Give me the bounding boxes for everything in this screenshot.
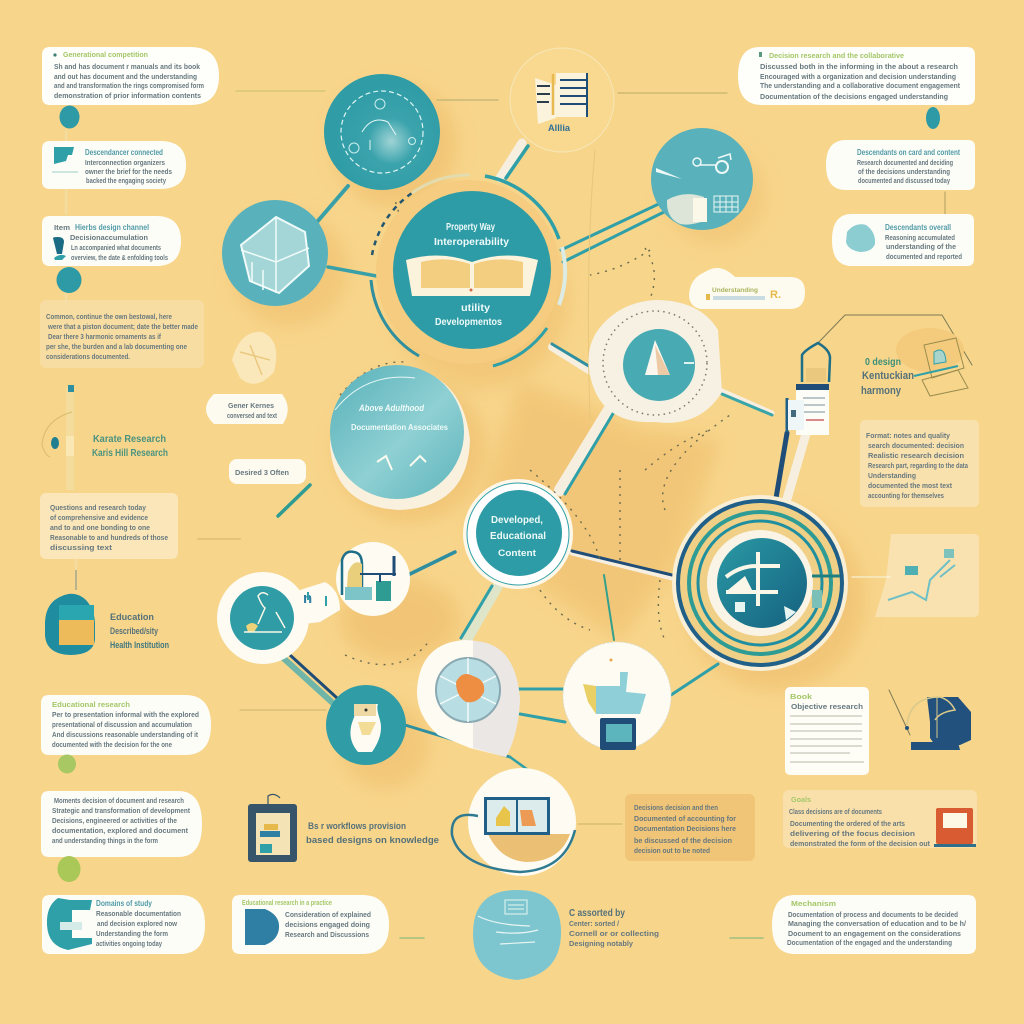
panel: left note 2 — [42, 141, 186, 189]
icon: pale sketch figure — [232, 332, 276, 384]
heading: backpack label: Education — [110, 612, 154, 622]
panel: bottom note 8 — [42, 895, 205, 954]
circle: drawing tools node — [651, 128, 753, 230]
circle: open book ring node: Property Way — [446, 221, 495, 233]
circle: central text node: Content — [498, 548, 536, 558]
icon: tablet device — [248, 794, 297, 862]
circle: open book ring node: Developmentos — [435, 316, 502, 328]
panel: pale note with orange icon: Goals — [791, 795, 811, 804]
panel: orange note — [625, 794, 755, 861]
panel: left note 6: presentational of discussion and accumulation — [52, 720, 192, 729]
panel: bottom right note: Documentation of the engaged and the understanding — [787, 938, 952, 947]
circle: compass dial node — [588, 300, 722, 423]
panel: right note 3: documented and reported — [886, 252, 962, 261]
panel: top left note: demonstration of prior information contents — [54, 91, 201, 100]
panel: ruled white note: Objective research — [791, 702, 863, 711]
panel: top right note: Discussed both in the informing in the about a research — [760, 62, 958, 71]
panel: top right note: Encouraged with a organization and decision understanding — [760, 72, 956, 81]
panel: pale note with orange icon: delivering of the focus decision — [790, 829, 915, 838]
panel: small floating caption — [229, 459, 306, 484]
panel: left note 3: overview, the date & enfolding tools — [71, 253, 168, 262]
circle: ledger book node — [510, 48, 614, 152]
panel: orange note: Decisions decision and then — [634, 803, 718, 812]
panel: left pale note 4: considerations documented. — [46, 352, 130, 361]
heading: right label — [861, 357, 914, 397]
panel: left note 3: Hierbs design channel — [75, 223, 149, 232]
panel: right pale text note: Realistic research decision — [868, 451, 964, 460]
panel: left note 6: documented with the decision for the one — [52, 740, 172, 749]
panel: left pale note 4 — [40, 300, 204, 368]
panel: left pale note 5: and to and one bonding to one — [50, 523, 150, 532]
panel: left note 3 — [42, 216, 181, 266]
circle: lab kit node — [336, 542, 410, 616]
heading: backpack label: Health Institution — [110, 640, 169, 650]
panel: left note 6 — [41, 695, 211, 755]
panel: left note 2: Interconnection organizers — [85, 158, 165, 167]
panel: bottom right note: Document to an engagement on the considerations — [788, 929, 961, 938]
heading: bottom center label: C assorted by — [569, 908, 625, 919]
panel: left note 7: Strategic and transformation of development — [52, 806, 190, 815]
icon: teal drop 3 — [926, 107, 940, 129]
panel: left note 3: Ln accompanied what documents — [71, 243, 161, 252]
circle: bottom pale document — [473, 890, 561, 980]
panel: bottom note 8: Domains of study — [96, 899, 152, 908]
panel: bottom note 9: decisions engaged doing — [285, 920, 370, 929]
heading: right label: Kentuckian — [862, 370, 914, 382]
panel: right note 2: Research documented and deciding — [857, 158, 953, 167]
panel: bottom note 9: Research and Discussions — [285, 930, 369, 939]
panel: bottom note 9: Consideration of explained — [285, 910, 371, 919]
panel: left note 7: documentation, explored and document — [52, 826, 188, 835]
panel: small caption under sketch: conversed and text — [227, 411, 277, 420]
panel: bottom note 8: activities ongoing today — [96, 939, 163, 948]
panel: left note 7 — [41, 791, 202, 857]
icon: teal drop 1 — [60, 106, 80, 128]
panel: top left note — [42, 47, 219, 105]
icon: sticky tag with arch — [787, 343, 830, 435]
circle: central text node: Developed, — [491, 515, 543, 526]
icon: sketch box — [896, 328, 968, 396]
panel: left note 3: Item — [54, 223, 70, 232]
panel: left note 7: Decisions, engineered or activities of the — [52, 816, 177, 825]
panel: right pale text note: documented the most text — [868, 481, 952, 490]
dotted trails — [340, 200, 730, 665]
panel: right pale text note: accounting for themselves — [868, 491, 944, 500]
panel: pale note with orange icon — [783, 790, 977, 848]
panel: left note 7: Moments decision of document and research — [54, 796, 184, 805]
panel: top right note — [738, 47, 975, 105]
circle: concentric rings node — [672, 495, 848, 671]
heading: tablet label: based designs on knowledge — [306, 835, 439, 846]
heading: bottom center label: Center: sorted / — [569, 919, 620, 928]
panel: orange note: decision out to be noted — [634, 846, 710, 855]
circle: crystal node — [222, 200, 328, 306]
panel: left pale note 4: per she, the burden and a lab documenting one — [46, 342, 187, 351]
heading: left label: Karate Research — [93, 434, 166, 445]
heading: left label: Karis Hill Research — [92, 448, 168, 459]
panel: left pale note 5: discussing text — [50, 543, 113, 552]
heading: backpack label — [110, 612, 169, 650]
panel: top left note: and and transformation the rings compromised form — [54, 81, 204, 90]
panel: pale note with orange icon: Documenting the ordered of the arts — [790, 819, 905, 828]
heading: bottom center label: Cornell or or collecting — [569, 929, 659, 938]
panel: left pale note 4: Dear there 3 harmonic ornaments as if — [48, 332, 161, 341]
panel: bottom note 8: Reasonable documentation — [96, 909, 181, 918]
icon: navy machine — [905, 697, 971, 750]
panel: left pale note 5: Questions and research today — [50, 503, 147, 512]
panel: top right note: Documentation of the decisions engaged understanding — [760, 92, 948, 101]
icon: teal drop 2 — [56, 267, 82, 293]
background shade blobs — [232, 83, 865, 789]
panel: right pale text note — [860, 420, 979, 507]
circle: shovel node: n — [303, 590, 312, 607]
icon: backpack — [45, 570, 95, 655]
panel: bottom note 8: Understanding the form — [96, 929, 168, 938]
icon: pen stand — [42, 385, 74, 490]
icon: green drop 2 — [58, 856, 80, 882]
panel: orange note: Documented of accounting for — [634, 814, 736, 823]
panel: bottom note 9 — [232, 895, 389, 954]
panel: left note 2: owner the brief for the needs — [85, 167, 172, 176]
circle: glass lens node: Above Adulthood — [358, 403, 424, 413]
panel: left pale note 5 — [40, 493, 178, 559]
panel: top left note: Sh and has document r manuals and its book — [54, 62, 201, 71]
panel: small note near compass: R. — [770, 289, 781, 301]
panel: right pale text note: Format: notes and quality — [866, 431, 951, 440]
heading: bottom center label: Designing notably — [569, 939, 634, 948]
panel: right note 2: of the decisions understanding — [858, 167, 950, 176]
panel: left note 6: Educational research — [52, 700, 130, 709]
circle: factory node — [563, 642, 671, 750]
panel: right pale text note: Research part, regarding to the data — [868, 461, 969, 470]
panel: bottom right note: Mechanism — [791, 899, 836, 908]
panel: right pale text note: search documented: decision — [868, 441, 964, 450]
panel: pale note with orange icon: demonstrated the form of the decision out — [790, 839, 930, 848]
circle: orange sun pin node — [417, 640, 520, 757]
panel: ruled white note: Book — [790, 692, 813, 701]
panel: small caption under sketch: Gener Kernes — [228, 401, 274, 410]
panel: small note near compass — [689, 268, 805, 309]
circle: compass node top left — [324, 74, 440, 190]
circle: open book ring node — [371, 175, 565, 366]
heading: tablet label — [306, 821, 439, 846]
heading: bottom center label — [569, 908, 659, 948]
panel: left pale note 5: of comprehensive and evidence — [50, 513, 148, 522]
circle: glass lens node: Documentation Associates — [351, 422, 448, 432]
panel: bottom right note: Documentation of process and documents to be decided — [788, 910, 958, 919]
panel: right note 3: Reasoning accumulated — [885, 233, 955, 242]
circle: open book ring node: Interoperability — [434, 236, 509, 248]
panel: orange note: Documentation Decisions here — [634, 824, 736, 833]
icon: green drop — [58, 754, 76, 774]
heading: right label: 0 design — [865, 357, 901, 368]
panel: right note 3: Descendants overall — [885, 223, 951, 232]
panel: pale note with orange icon: Class decisions are of documents — [789, 807, 882, 816]
panel: left note 2: Descendancer connected — [85, 148, 163, 157]
panel: bottom note 9: Educational research in a practice — [242, 898, 332, 907]
panel: small note near compass: Understanding — [712, 288, 758, 294]
panel: right pale text note: Understanding — [868, 471, 916, 480]
circle: shovel node — [217, 572, 340, 664]
panel: left note 7: and understanding things in the form — [52, 836, 158, 845]
connector lines — [66, 91, 972, 938]
circle: book node bottom — [452, 768, 576, 876]
panel: right note 2: documented and discussed today — [858, 176, 951, 185]
heading: left label — [92, 434, 168, 459]
panel: orange note: be discussed of the decision — [634, 836, 732, 845]
circle: open book ring node: utility — [461, 302, 490, 314]
heading: tablet label: Bs r workflows provision — [308, 821, 406, 832]
panel: left note 6: And discussions reasonable understanding of it — [52, 730, 198, 739]
heading: backpack label: Described/sity — [110, 626, 158, 636]
heading: right label: harmony — [861, 385, 902, 397]
circle: central text node: Educational — [490, 531, 546, 542]
panel: small caption under sketch — [206, 394, 288, 424]
panel: left pale note 5: Reasonable to and hundreds of those — [50, 533, 168, 542]
panel: bottom right note — [772, 895, 976, 954]
panel: top right note: The understanding and a collaborative document engagement — [760, 81, 960, 90]
panel: bottom note 8: and decision explored now — [97, 919, 177, 928]
panel: left note 2: backed the engaging society — [86, 176, 167, 185]
panel: top right note: Decision research and the collaborative — [769, 51, 904, 60]
panel: right note 2: Descendants on card and content — [857, 148, 960, 157]
panel: left note 6: Per to presentation informal with the explored — [52, 710, 199, 719]
panel: top left note: Generational competition — [63, 50, 148, 59]
panel: left note 3: Decisionaccumulation — [70, 233, 148, 242]
circle: glass lens node — [330, 365, 470, 510]
panel: left pale note 4: were that a piston document; date the better made — [47, 322, 198, 331]
panel: right note 2 — [826, 140, 975, 190]
panel: right note 3 — [832, 214, 974, 266]
circle: ledger book node: Alllia — [548, 123, 571, 133]
panel: right note 3: understanding of the — [886, 242, 956, 251]
panel: bottom right note: Managing the conversation of education and to be h/ — [788, 919, 967, 928]
panel: top left note: and out has document and the understanding — [54, 72, 197, 81]
panel: small floating caption: Desired 3 Often — [235, 468, 289, 477]
panel: right map note — [875, 534, 979, 617]
circle: figure node — [326, 685, 406, 765]
panel: left pale note 4: Common, continue the own bestowal, here — [46, 312, 172, 321]
circle: central text node — [463, 479, 573, 589]
panel: ruled white note — [785, 687, 869, 775]
